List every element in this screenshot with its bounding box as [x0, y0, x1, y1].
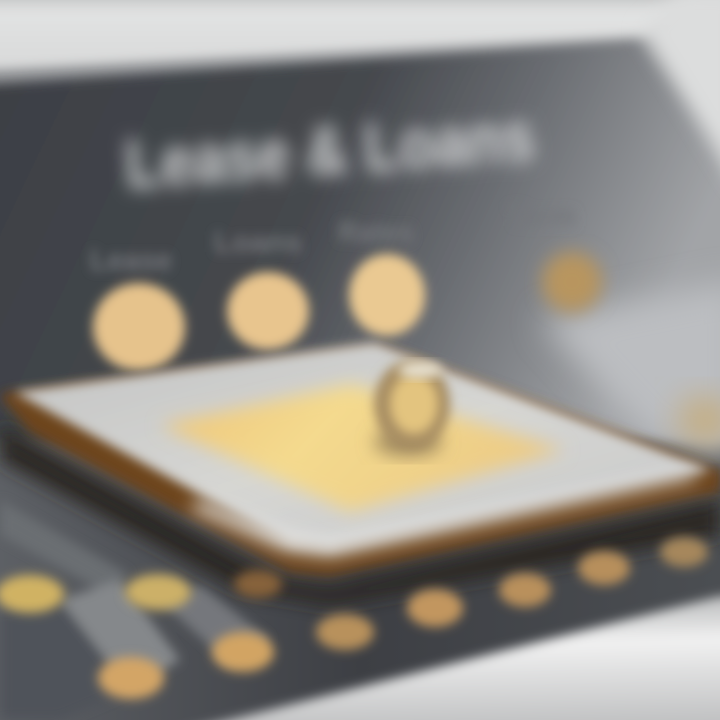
- right side light reflection: [540, 280, 720, 460]
- dot: [660, 537, 708, 567]
- tray: lower lit rim: [190, 472, 700, 556]
- faint coin at right: [542, 252, 602, 312]
- yellow pill 1: [0, 575, 64, 613]
- dot: [316, 614, 374, 650]
- coin shadow: [374, 428, 442, 456]
- centre coin: [374, 360, 450, 456]
- faint gold glow lower right: [677, 396, 720, 444]
- dot: [98, 657, 164, 699]
- tray: white top surface: [14, 342, 712, 550]
- bottom right white band: [170, 596, 720, 720]
- coin rim: [374, 360, 450, 448]
- dot: [212, 632, 274, 672]
- label 4: Term: [508, 200, 576, 233]
- coin highlight: [398, 362, 442, 378]
- coin 3: [349, 254, 425, 336]
- gold dots: [0, 537, 708, 699]
- label 1: Lease: [90, 244, 172, 277]
- tray: gold inner panel: [160, 384, 565, 512]
- label 2: Loans: [214, 226, 302, 259]
- title: Lease & Loans: [123, 97, 537, 203]
- dot: [499, 573, 551, 607]
- column labels: [90, 200, 576, 277]
- top right light corner: [640, 0, 720, 190]
- background: lower dark surface: [0, 400, 720, 720]
- dot behind tray: [234, 570, 282, 598]
- dot: [578, 551, 630, 585]
- coin 2: [227, 272, 309, 350]
- dark panel: [0, 42, 720, 440]
- dot: [407, 589, 463, 627]
- tray: brown shadow edge: [0, 345, 720, 576]
- lower stripes: [0, 500, 270, 720]
- coin 1: [93, 283, 185, 371]
- tray: shadow below: [0, 425, 720, 605]
- coin face: [390, 374, 438, 434]
- peach coins: [93, 254, 425, 371]
- yellow pill 2: [125, 574, 191, 610]
- label 3: Rates: [338, 216, 414, 249]
- top light frame: [0, 0, 720, 70]
